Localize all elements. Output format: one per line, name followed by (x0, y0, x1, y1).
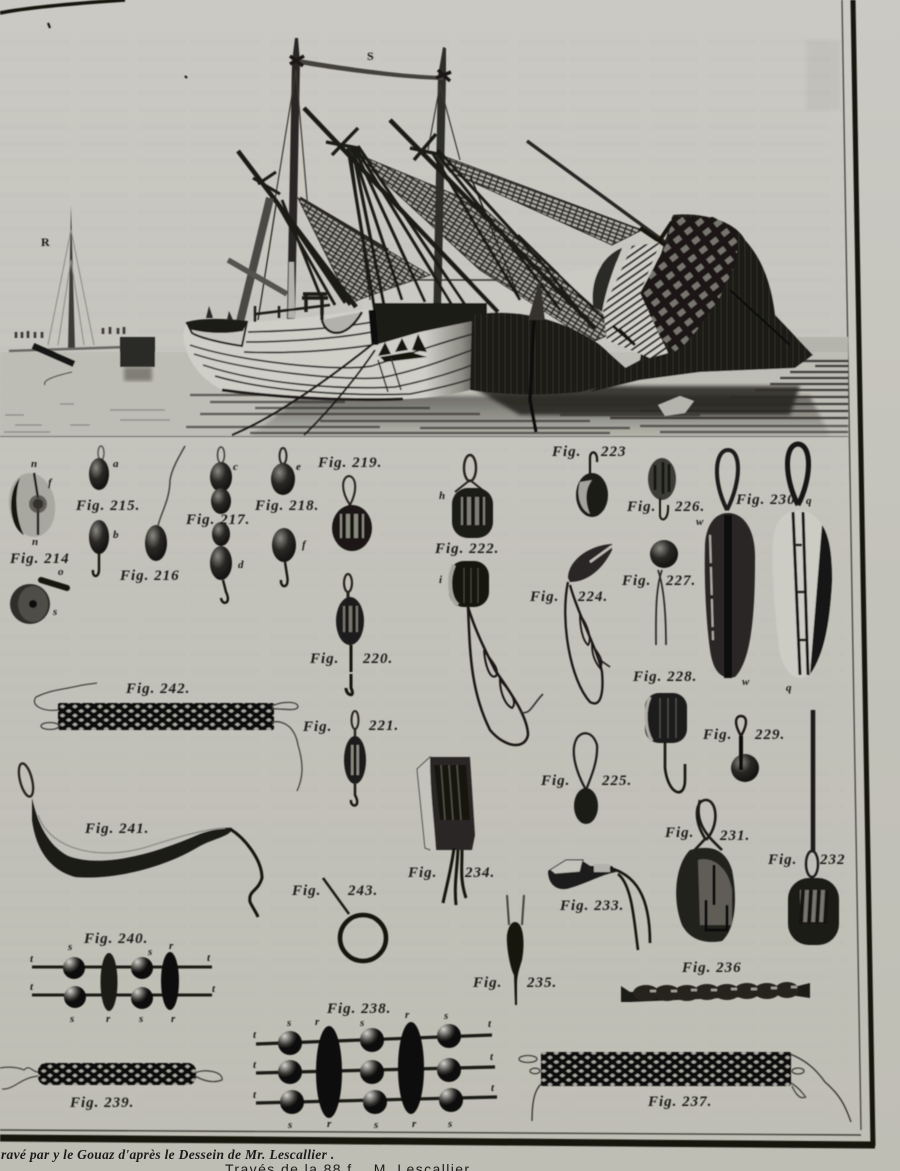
figure 229: Fig. (702, 727, 732, 743)
ship hull, light planked side (183, 294, 500, 400)
figure 217 (185, 447, 250, 603)
figure 236: Fig. 236 (681, 960, 742, 976)
figure 222 blocks h and i: i (439, 574, 443, 586)
figure 220: Fig. (309, 651, 339, 667)
figure 240: s (69, 1013, 74, 1025)
figure 230 long blocks w and q (696, 444, 832, 694)
figure 238: s (373, 1119, 378, 1131)
figure 238: s (359, 1017, 364, 1029)
figure 214 (5, 458, 70, 624)
figure 224 (529, 544, 612, 703)
background deck and hull of ship (353, 240, 660, 330)
figure 227: Fig. (621, 573, 651, 589)
figure 225: Fig. (540, 773, 570, 789)
figure 237: Fig. 237. (647, 1094, 712, 1110)
figure 240: t (30, 953, 34, 965)
figure 222 blocks h and i: Fig. 222. (434, 541, 499, 557)
distant mast R and quay (9, 205, 155, 381)
figure 238: t (253, 1089, 257, 1101)
figure 231 (664, 800, 750, 942)
figure 224: Fig. (529, 589, 559, 605)
figure 238: Fig. 238. (326, 1001, 391, 1017)
figure 238: s (286, 1017, 291, 1029)
figure 238: r (405, 1009, 410, 1021)
figure 224: 224. (577, 589, 608, 605)
figure 232: 232 (819, 852, 846, 868)
figure 238: s (287, 1119, 292, 1131)
figure 221: Fig. (302, 719, 332, 735)
figure 238: t (253, 1029, 257, 1041)
two upright masts and spar S (275, 38, 460, 320)
figure 240: s (138, 1013, 143, 1025)
figure 238: r (412, 1118, 417, 1130)
netting panels (298, 152, 642, 342)
figure 238: t (490, 1051, 494, 1063)
figure 239 (0, 1063, 222, 1111)
figure 243 ring: 243. (347, 883, 378, 899)
figure 217: d (238, 559, 244, 571)
figure 236 (621, 960, 810, 1002)
figure 232: Fig. (767, 852, 797, 868)
figure 214: f (48, 477, 53, 489)
figure 230 long blocks w and q: q (786, 682, 792, 694)
figure 240: s (147, 946, 152, 958)
figure 214: n (32, 536, 38, 548)
figure 232 (767, 710, 846, 945)
figure 220: 220. (362, 651, 393, 667)
figure 227: 227. (665, 573, 696, 589)
figure 233: Fig. 233. (559, 898, 624, 914)
figure 238: t (253, 1059, 257, 1071)
figure 238: r (315, 1016, 320, 1028)
figure 243 ring: Fig. (291, 883, 321, 899)
figure 228 (632, 669, 697, 792)
figure 220 (309, 574, 393, 695)
figure 226 (626, 458, 705, 519)
figure 240: s (67, 941, 72, 953)
figure 223 (551, 444, 626, 517)
figure 225 (540, 733, 632, 824)
figure 226: Fig. (626, 499, 656, 515)
figure 242 braided sennit: Fig. 242. (125, 681, 190, 697)
figure 223: Fig. (551, 444, 581, 460)
figure 240: r (171, 1013, 176, 1025)
figure 237 (519, 1052, 851, 1122)
figure 226: 226. (674, 499, 705, 515)
figure 238: t (491, 1082, 495, 1094)
panel: harbour scene with careened ship (0, 38, 848, 436)
sheers and rigging (228, 108, 665, 328)
anchor cables (232, 343, 375, 435)
figure 240: Fig. 240. (83, 931, 148, 947)
figure 229 (702, 716, 785, 782)
figure 218: Fig. 218. (254, 498, 319, 514)
figure 231: Fig. (664, 825, 694, 841)
figure 243 ring (291, 878, 386, 961)
figure 215: a (113, 458, 119, 470)
figure 227 (621, 540, 696, 645)
figure 240: r (169, 940, 174, 952)
figure 234 (407, 757, 495, 905)
figure 225: 225. (601, 773, 632, 789)
ship hull, dark shadowed side (470, 278, 628, 432)
figure 230 long blocks w and q: Fig. 230 (735, 492, 796, 508)
figure 221: 221. (368, 718, 399, 734)
figure 216 (119, 446, 185, 584)
figure 222 blocks h and i: h (439, 490, 445, 502)
figure 218: f (302, 539, 307, 551)
figure 240: r (106, 1013, 111, 1025)
label S: S (367, 49, 374, 63)
figure 241 tapered strop (16, 762, 262, 917)
figure 214: s (52, 606, 57, 618)
figure 230 long blocks w and q: q (806, 495, 812, 507)
figure 214: o (58, 566, 64, 578)
figure 219 (317, 455, 382, 551)
figure 230 long blocks w and q: w (742, 676, 750, 688)
figure 215: Fig. 215. (75, 498, 140, 514)
figure 240 (30, 931, 216, 1025)
figure 234: Fig. (407, 865, 437, 881)
figure 228: Fig. 228. (632, 669, 697, 685)
sea with water streaks (0, 337, 848, 436)
figure 229: 229. (754, 727, 785, 743)
careened wreck: planks and stern lattice (590, 214, 813, 392)
figure 239: Fig. 239. (69, 1095, 134, 1111)
figure 241 tapered strop: Fig. 241. (84, 821, 149, 837)
figure 217: c (233, 461, 238, 473)
figure 240: t (212, 983, 216, 995)
figure 242 braided sennit (34, 681, 302, 791)
figure 238: s (447, 1118, 452, 1130)
figure 217: Fig. 217. (185, 512, 250, 528)
figure 233 (548, 860, 650, 950)
figure 216: Fig. 216 (119, 568, 180, 584)
engraver credit line: ravé par y le Gouaz d'après le Dessein de Mr. Lescallier . (1, 1147, 334, 1162)
figure 235: 235. (526, 975, 557, 991)
figure 238: s (443, 1010, 448, 1022)
figure 235 (472, 895, 557, 1005)
figure 215: b (113, 529, 119, 541)
label R: R (41, 235, 50, 249)
figure 240: t (30, 981, 34, 993)
figure 235: Fig. (472, 975, 502, 991)
figure 221 (302, 711, 399, 805)
figure 214: n (31, 458, 37, 470)
figure 214: Fig. 214 (9, 551, 70, 567)
figure 223: 223 (600, 444, 626, 460)
figure 222 blocks h and i (434, 455, 543, 745)
figure 234: 234. (464, 865, 495, 881)
figure 238 (253, 1001, 497, 1131)
figure 218: e (296, 461, 301, 473)
figure 215 (75, 446, 140, 576)
figure 231: 231. (719, 828, 750, 844)
figure 238: t (488, 1018, 492, 1030)
figure 240: t (207, 952, 211, 964)
figure 238: r (327, 1118, 332, 1130)
figure 219: Fig. 219. (317, 455, 382, 471)
figure 230 long blocks w and q: w (696, 516, 704, 528)
figure 218 (254, 448, 319, 586)
